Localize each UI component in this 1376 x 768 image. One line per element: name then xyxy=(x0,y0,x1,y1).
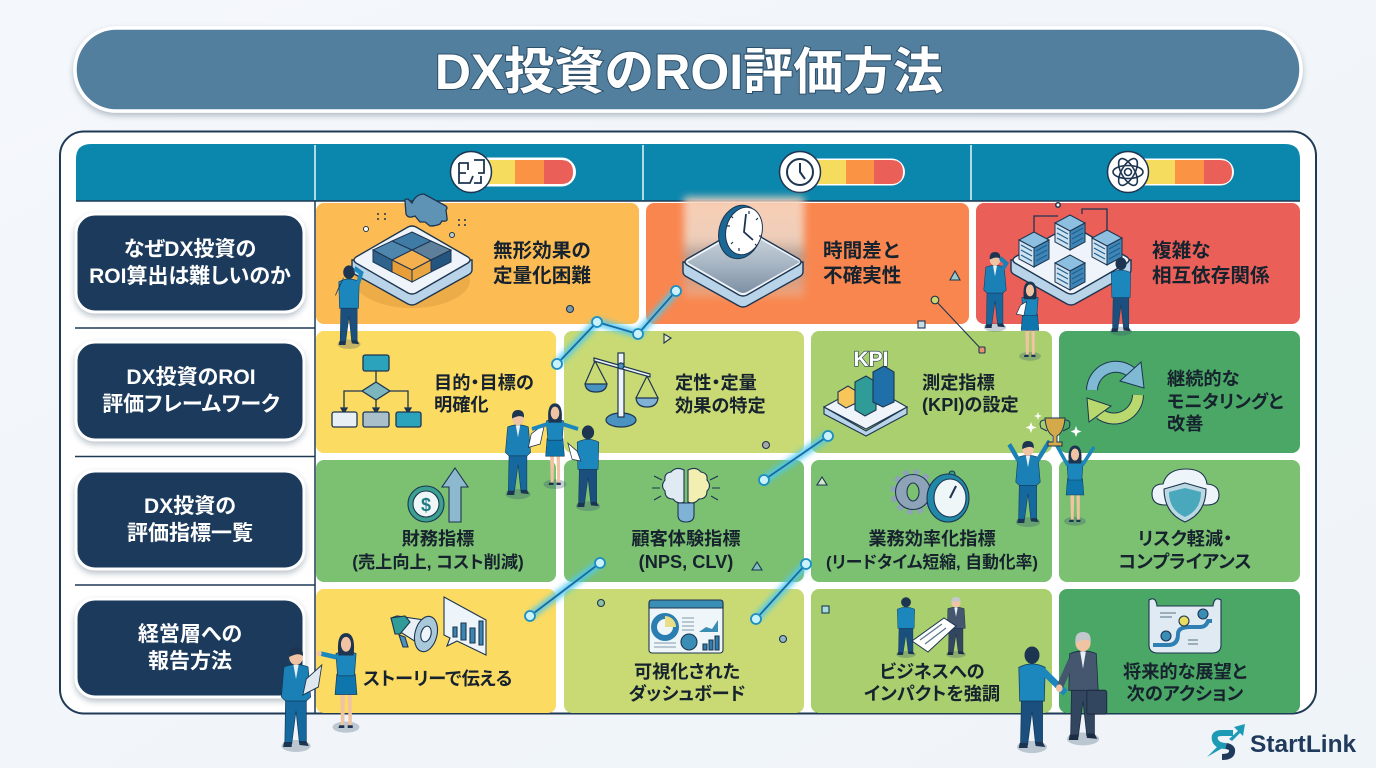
cell: monitoring: 継続的な xyxy=(1167,368,1240,389)
cell: KPI: 測定指標 xyxy=(922,372,995,393)
cell: operational efficiency: (リードタイム短縮, 自動化率) xyxy=(826,552,1038,572)
cell: qualitative quantitative xyxy=(564,331,804,453)
cell: intangible effects: 定量化困難 xyxy=(493,265,591,287)
icon: dashboard xyxy=(649,600,723,653)
icon: two people with report xyxy=(896,597,966,658)
cell: business impact xyxy=(811,589,1052,713)
icon: coin and up arrow: $ xyxy=(421,495,431,515)
icon: KPI bar platform xyxy=(824,348,907,436)
row label 2: 評価フレームワーク xyxy=(102,393,280,416)
cell: KPI: (KPI)の設定 xyxy=(922,395,1019,415)
main matrix panel xyxy=(60,132,1316,714)
row label 4 xyxy=(76,599,304,697)
row label 3 xyxy=(76,471,304,569)
cell: future outlook: 将来的な展望と xyxy=(1123,662,1247,682)
people: executive handshake xyxy=(1017,632,1107,753)
cell: storytelling xyxy=(316,589,556,713)
row label 2: DX投資のROI xyxy=(126,366,256,389)
cell: business impact: ビジネスへの xyxy=(879,661,985,682)
icon: puzzle xyxy=(450,152,492,192)
cell: storytelling: ストーリーで伝える xyxy=(363,669,512,689)
decorative nodes xyxy=(566,203,1060,642)
header: difficulty meter 2 xyxy=(780,152,905,192)
people: celebrating with trophy xyxy=(1009,412,1094,527)
logo: StartLink xyxy=(1207,724,1357,758)
cell: time lag xyxy=(646,197,969,324)
cell: customer experience xyxy=(564,460,804,582)
icon: brain bulb xyxy=(652,468,720,522)
cell: financial: (売上向上, コスト削減) xyxy=(352,552,524,572)
cell: time lag: 不確実性 xyxy=(823,265,901,287)
cell: dashboard xyxy=(564,589,804,713)
cell: customer experience: 顧客体験指標 xyxy=(631,528,741,549)
row label 3: DX投資の xyxy=(144,495,236,518)
cell: operational efficiency: 業務効率化指標 xyxy=(868,528,996,549)
cell: monitoring: 改善 xyxy=(1167,414,1203,434)
cell: KPI xyxy=(811,331,1052,453)
icon: coin and up arrow xyxy=(408,468,468,522)
title text: DX投資のROI評価方法 xyxy=(435,44,943,100)
people: thinking man xyxy=(335,265,361,349)
icon: network atom xyxy=(1108,152,1148,192)
icon: clock platform xyxy=(683,197,804,307)
row label 2 xyxy=(76,342,304,440)
people: discussion group xyxy=(505,403,600,511)
cell: risk xyxy=(1059,460,1300,582)
icon: puzzle platform xyxy=(352,194,472,308)
people: presenters xyxy=(281,633,359,752)
cell: monitoring xyxy=(1059,331,1300,453)
icon: KPI bar platform: KPI xyxy=(853,348,889,371)
cell: financial xyxy=(316,460,556,582)
cell: objectives: 目的・目標の xyxy=(434,373,534,393)
cell: intangible effects xyxy=(316,194,639,324)
header: difficulty meter 3 xyxy=(1108,152,1234,192)
row label 4: 報告方法 xyxy=(148,650,232,673)
row label 1: ROI算出は難しいのか xyxy=(89,265,291,288)
cell: objectives: 明確化 xyxy=(434,395,489,415)
cell: customer experience: (NPS, CLV) xyxy=(639,552,733,572)
icon: flowchart xyxy=(332,355,421,427)
grid lines xyxy=(75,201,315,714)
icon: megaphone and chart xyxy=(391,597,486,655)
cell: risk: リスク軽減・ xyxy=(1138,528,1232,549)
cell: dashboard: 可視化された xyxy=(634,662,740,682)
cell: future outlook: 次のアクション xyxy=(1127,684,1244,704)
cell: interdependency: 相互依存関係 xyxy=(1152,265,1270,287)
logo mark xyxy=(1207,724,1245,757)
cell: risk: コンプライアンス xyxy=(1118,552,1252,572)
cell: objectives xyxy=(316,331,556,453)
icon: roadmap xyxy=(1149,599,1221,653)
cell: qualitative quantitative: 定性・定量 xyxy=(675,373,757,393)
cell: qualitative quantitative: 効果の特定 xyxy=(675,396,766,416)
icon: cycle arrows xyxy=(1087,362,1144,422)
sparkles xyxy=(1026,412,1082,437)
cell: monitoring: モニタリングと xyxy=(1167,391,1283,412)
row label 4: 経営層への xyxy=(138,623,242,646)
icon: cloud shield xyxy=(1152,469,1219,522)
cell: interdependency: 複雑な xyxy=(1152,240,1211,262)
cell: intangible effects: 無形効果の xyxy=(493,240,591,262)
glowing connector lines xyxy=(525,286,833,624)
icon: clock xyxy=(780,152,820,192)
cell: interdependency xyxy=(976,202,1300,324)
icon: trophy xyxy=(1040,418,1070,446)
cell: time lag: 時間差と xyxy=(823,240,901,262)
cell: financial: 財務指標 xyxy=(402,528,474,549)
cell: business impact: インパクトを強調 xyxy=(864,684,1000,704)
header: difficulty meter 1 xyxy=(450,152,575,192)
row label 1: なぜDX投資の xyxy=(124,238,256,261)
row label 1 xyxy=(76,214,304,312)
cell: operational efficiency xyxy=(811,460,1052,582)
row label 3: 評価指標一覧 xyxy=(127,522,253,545)
logo: StartLink: StartLink xyxy=(1250,731,1357,758)
cell: future outlook xyxy=(1059,589,1300,713)
people: team around servers xyxy=(984,252,1132,361)
title banner xyxy=(75,28,1301,111)
cell: dashboard: ダッシュボード xyxy=(628,683,746,704)
icon: balance scale xyxy=(585,353,658,427)
header band xyxy=(76,144,1300,201)
icon: gear and stopwatch xyxy=(893,471,969,522)
icon: server platform xyxy=(1011,202,1131,305)
